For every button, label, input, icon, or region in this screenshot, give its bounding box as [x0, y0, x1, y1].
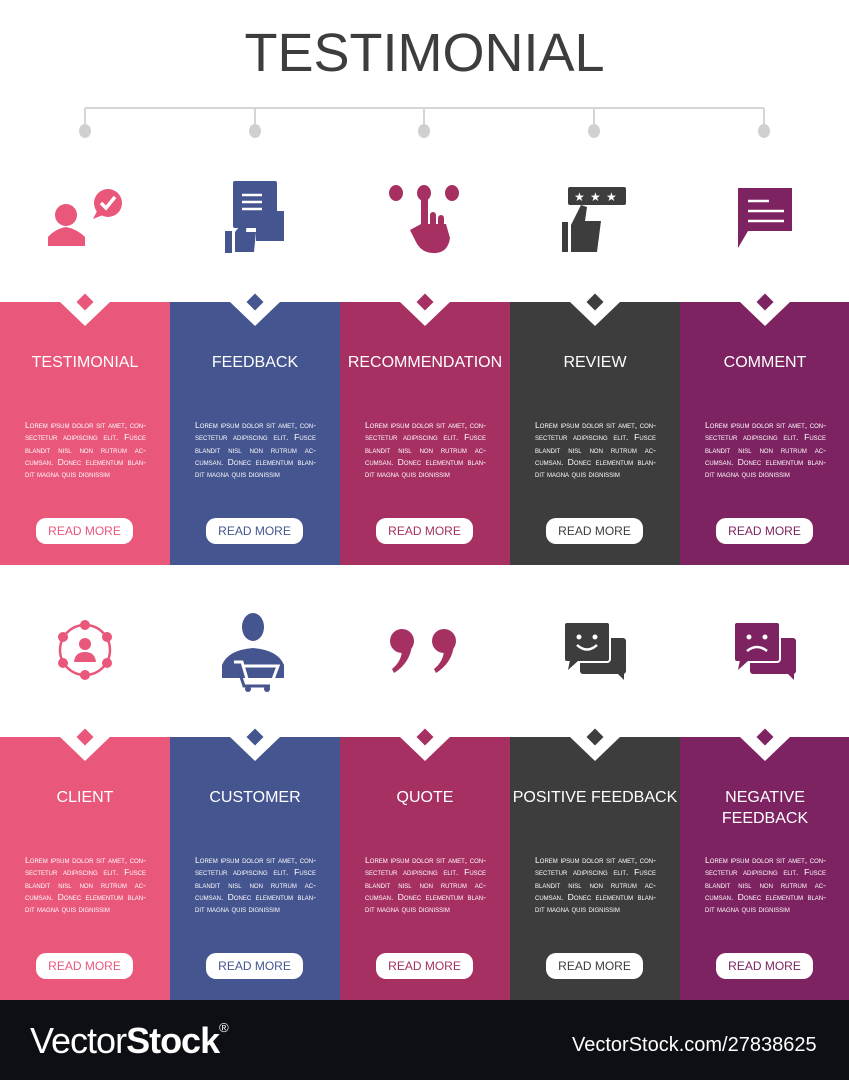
panel: positive feedback: Lorem ipsum dolor sit amet, con- [535, 855, 656, 865]
panel: recommendation: cumsan. Donec elementum blan- [365, 457, 486, 467]
panel: client: cumsan. Donec elementum blan- [25, 892, 146, 902]
panel: testimonial: READ MORE [48, 524, 121, 538]
panel: quote: sectetur adipiscing elit. Fusce [365, 867, 486, 877]
icon: negative feedback bubbles [735, 623, 796, 680]
panel: feedback: READ MORE [218, 524, 291, 538]
panel: review [510, 302, 680, 565]
panel: client: CLIENT [57, 789, 113, 806]
panel: testimonial: blandit nisl non rutrum ac- [25, 445, 146, 455]
panel: client: Lorem ipsum dolor sit amet, con- [25, 855, 146, 865]
icon: customer with cart [222, 613, 284, 692]
panel: recommendation: sectetur adipiscing elit. Fusce [365, 432, 486, 442]
panel: negative feedback: cumsan. Donec elementum blan- [705, 892, 826, 902]
panel: feedback: cumsan. Donec elementum blan- [195, 457, 316, 467]
panel: comment: cumsan. Donec elementum blan- [705, 457, 826, 467]
panel: negative feedback: READ MORE [728, 959, 801, 973]
panel: feedback: Lorem ipsum dolor sit amet, con- [195, 420, 316, 430]
panel: feedback: dit magna quis dignissim [195, 469, 280, 479]
title: TESTIMONIAL [244, 23, 605, 83]
panel: comment: blandit nisl non rutrum ac- [705, 445, 826, 455]
panel: comment: dit magna quis dignissim [705, 469, 790, 479]
panel: quote [340, 737, 510, 1000]
icon: hand pointing with dots [389, 185, 459, 254]
panel: quote: cumsan. Donec elementum blan- [365, 892, 486, 902]
panel: quote: dit magna quis dignissim [365, 904, 450, 914]
panel: negative feedback: dit magna quis dignissim [705, 904, 790, 914]
panel: client: blandit nisl non rutrum ac- [25, 880, 146, 890]
panel: customer: blandit nisl non rutrum ac- [195, 880, 316, 890]
panel: review: blandit nisl non rutrum ac- [535, 445, 656, 455]
panel: recommendation: dit magna quis dignissim [365, 469, 450, 479]
panel: comment: READ MORE [728, 524, 801, 538]
connector lines [79, 107, 770, 138]
panel: customer [170, 737, 340, 1000]
panel: client [0, 737, 170, 1000]
panel: review: dit magna quis dignissim [535, 469, 620, 479]
panel: review: cumsan. Donec elementum blan- [535, 457, 656, 467]
panel: testimonial: TESTIMONIAL [32, 354, 138, 371]
panel: customer: dit magna quis dignissim [195, 904, 280, 914]
panel: testimonial: Lorem ipsum dolor sit amet, con- [25, 420, 146, 430]
panel: testimonial: cumsan. Donec elementum blan- [25, 457, 146, 467]
panel: comment: sectetur adipiscing elit. Fusce [705, 432, 826, 442]
panel: recommendation: READ MORE [388, 524, 461, 538]
panel: positive feedback: blandit nisl non rutrum ac- [535, 880, 656, 890]
panel: quote: QUOTE [397, 789, 453, 806]
footer logo: VectorStock® [30, 1020, 228, 1061]
panel: positive feedback: cumsan. Donec elementum blan- [535, 892, 656, 902]
panel: customer: Lorem ipsum dolor sit amet, con- [195, 855, 316, 865]
footer url: VectorStock.com/27838625 [572, 1034, 817, 1056]
panel: positive feedback: POSITIVE FEEDBACK [513, 789, 677, 806]
panel: testimonial: sectetur adipiscing elit. Fusce [25, 432, 146, 442]
panel: negative feedback: blandit nisl non rutrum ac- [705, 880, 826, 890]
icon: quote marks [390, 629, 456, 673]
panel: comment: COMMENT [724, 354, 806, 371]
icon: client network [58, 620, 112, 680]
panel: customer: cumsan. Donec elementum blan- [195, 892, 316, 902]
panel: positive feedback: sectetur adipiscing elit. Fusce [535, 867, 656, 877]
panel: testimonial: dit magna quis dignissim [25, 469, 110, 479]
panel: negative feedback: FEEDBACK [722, 810, 808, 827]
panel: customer: READ MORE [218, 959, 291, 973]
icon: review stars thumbs up: ★ [590, 190, 601, 204]
panel: positive feedback: READ MORE [558, 959, 631, 973]
panel: negative feedback [680, 737, 849, 1000]
panel: recommendation [340, 302, 510, 565]
panel: quote: READ MORE [388, 959, 461, 973]
panel: testimonial [0, 302, 170, 565]
icon: review stars thumbs up: ★ [606, 190, 617, 204]
panel: quote: blandit nisl non rutrum ac- [365, 880, 486, 890]
panel: recommendation: Lorem ipsum dolor sit amet, con- [365, 420, 486, 430]
icon: review stars thumbs up [562, 187, 626, 252]
panel: customer: sectetur adipiscing elit. Fusce [195, 867, 316, 877]
panel: client: READ MORE [48, 959, 121, 973]
panel: client: dit magna quis dignissim [25, 904, 110, 914]
panel: feedback: blandit nisl non rutrum ac- [195, 445, 316, 455]
panel: review: READ MORE [558, 524, 631, 538]
panel: comment: Lorem ipsum dolor sit amet, con- [705, 420, 826, 430]
panel: negative feedback: Lorem ipsum dolor sit amet, con- [705, 855, 826, 865]
panel: review: sectetur adipiscing elit. Fusce [535, 432, 656, 442]
icon: feedback document thumbs up [225, 181, 284, 253]
panel: negative feedback: NEGATIVE [725, 789, 805, 806]
icon: review stars thumbs up: ★ [574, 190, 585, 204]
panel: feedback [170, 302, 340, 565]
panel: negative feedback: sectetur adipiscing elit. Fusce [705, 867, 826, 877]
panel: client: sectetur adipiscing elit. Fusce [25, 867, 146, 877]
icon: person with check bubble [48, 189, 122, 246]
panel: positive feedback: dit magna quis dignissim [535, 904, 620, 914]
icon: comment bubble [738, 188, 792, 248]
panel: recommendation: RECOMMENDATION [348, 354, 502, 371]
panel: review: Lorem ipsum dolor sit amet, con- [535, 420, 656, 430]
panel: quote: Lorem ipsum dolor sit amet, con- [365, 855, 486, 865]
icon: positive feedback bubbles [565, 623, 626, 680]
panel: comment [680, 302, 849, 565]
panel: customer: CUSTOMER [209, 789, 301, 806]
panel: feedback: FEEDBACK [212, 354, 298, 371]
panel: review: REVIEW [563, 354, 627, 371]
footer [0, 1000, 849, 1080]
panel: feedback: sectetur adipiscing elit. Fusce [195, 432, 316, 442]
panel: recommendation: blandit nisl non rutrum ac- [365, 445, 486, 455]
panel: positive feedback [510, 737, 680, 1000]
